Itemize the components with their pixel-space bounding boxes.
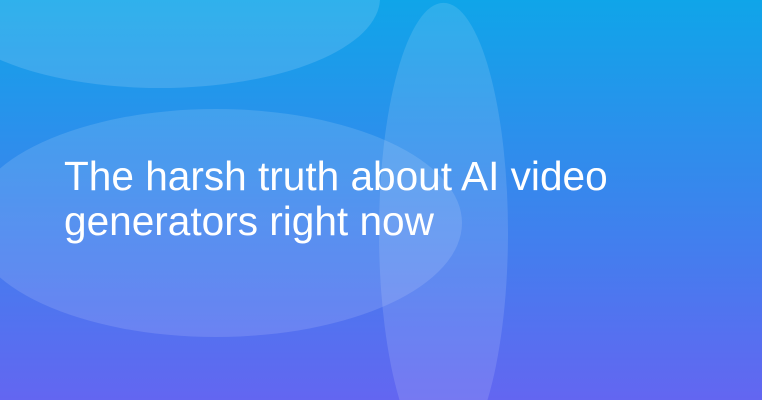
title [64,153,608,244]
title: The harsh truth about AI video [64,153,608,199]
title: generators right now [64,198,434,244]
